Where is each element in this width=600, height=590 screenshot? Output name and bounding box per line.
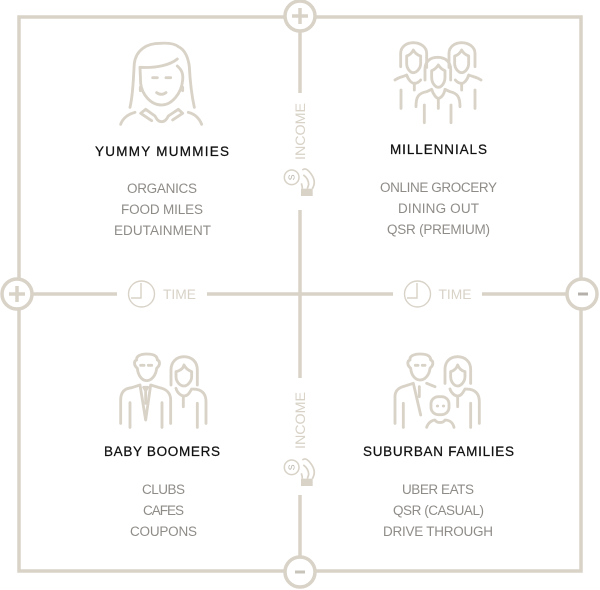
panel: millennials [380, 43, 497, 237]
panel: baby boomers [104, 354, 220, 539]
text: baby boomers items: CAFES [143, 503, 184, 518]
label: time right: TIME [438, 286, 472, 302]
text: millennials items: QSR (PREMIUM) [387, 222, 490, 237]
axis node: bottom minus [285, 557, 315, 587]
icon: money in hand bottom: S [287, 464, 297, 470]
text: baby boomers items [130, 482, 197, 539]
icon: woman [121, 43, 202, 124]
icon: money in hand top [284, 169, 314, 196]
axis node: right minus [567, 279, 597, 309]
text: suburban families items: DRIVE THROUGH [383, 524, 493, 539]
icon: clock left [128, 281, 154, 307]
text: yummy mummies items: EDUTAINMENT [114, 223, 211, 238]
text: suburban families items: UBER EATS [402, 482, 474, 497]
icon: family [395, 354, 479, 427]
text: baby boomers items: CLUBS [142, 482, 185, 497]
axis node: left plus [2, 279, 32, 309]
label: time left: TIME [163, 286, 196, 302]
text: baby boomers items: COUPONS [130, 524, 197, 539]
text: suburban families items: QSR (CASUAL) [393, 503, 484, 518]
text: yummy mummies items: FOOD MILES [121, 202, 203, 217]
icon: couple [121, 354, 206, 427]
icon: money in hand top: S [287, 174, 297, 180]
panel: suburban families [363, 354, 514, 539]
heading: baby boomers: BABY BOOMERS [104, 444, 220, 459]
text: millennials items [380, 180, 497, 237]
text: suburban families items [383, 482, 493, 539]
icon: clock right [404, 281, 430, 307]
axis node: top plus [285, 1, 315, 31]
text: yummy mummies items: ORGANICS [127, 181, 197, 196]
text: millennials items: DINING OUT [398, 201, 479, 216]
icon: money in hand bottom [284, 459, 314, 486]
label: income top: INCOME [292, 103, 308, 160]
heading: yummy mummies: YUMMY MUMMIES [95, 144, 229, 159]
label: income bottom: INCOME [292, 392, 308, 449]
heading: millennials: MILLENNIALS [390, 142, 487, 157]
heading: suburban families: SUBURBAN FAMILIES [363, 444, 514, 459]
icon: group of three women [395, 43, 481, 123]
text: millennials items: ONLINE GROCERY [380, 180, 497, 195]
panel: yummy mummies [95, 43, 229, 238]
text: yummy mummies items [114, 181, 211, 238]
